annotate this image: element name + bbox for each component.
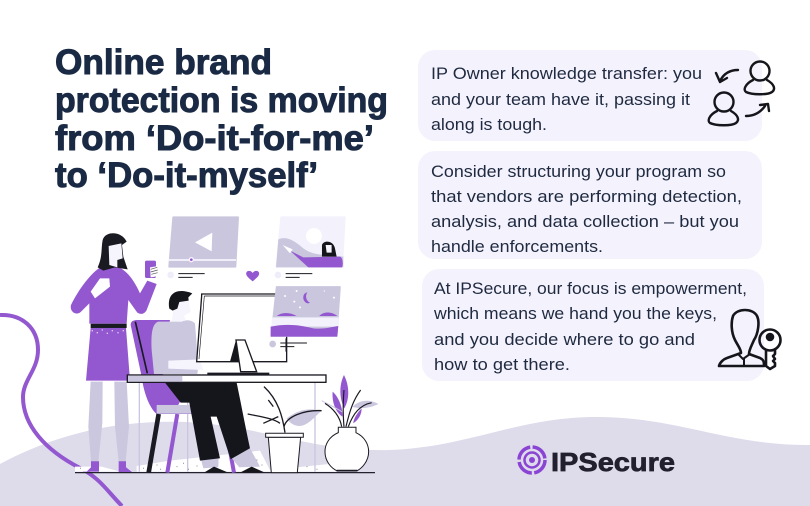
text: knowledge transfer: IP Owner knowledge transfer: you <box>431 64 702 83</box>
title: to ‘Do-it-myself’ <box>55 156 318 195</box>
hair <box>169 291 192 311</box>
text: knowledge transfer: along is tough. <box>431 115 547 134</box>
chair <box>131 320 234 473</box>
icon: person with key <box>719 310 780 369</box>
text: empowerment: At IPSecure, our focus is empowerment, <box>434 279 747 298</box>
panel: knowledge transfer <box>418 50 774 141</box>
belt <box>91 324 127 328</box>
hair <box>98 233 128 271</box>
monitor <box>197 294 287 374</box>
pants <box>165 383 250 461</box>
face and neck <box>172 301 191 322</box>
text: empowerment: and you decide where to go and <box>434 330 695 349</box>
text: program structure <box>431 162 742 256</box>
panel: night landscape <box>269 287 340 352</box>
title <box>55 43 388 195</box>
chair back <box>131 320 227 414</box>
title: protection is moving <box>55 81 388 120</box>
shoes <box>204 467 265 473</box>
panel: program structure <box>418 151 762 259</box>
text: program structure: handle enforcements. <box>431 237 603 256</box>
torso <box>151 320 198 374</box>
panel: photo card <box>275 217 345 278</box>
desk <box>127 375 326 382</box>
legs <box>88 382 129 462</box>
plant: vase <box>322 375 377 471</box>
skirt <box>86 328 130 381</box>
sweater <box>71 266 157 324</box>
face <box>109 243 123 267</box>
text: knowledge transfer <box>431 64 702 134</box>
man <box>151 291 265 473</box>
text: empowerment: which means we hand you the keys, <box>433 304 717 323</box>
decorative curve <box>0 315 122 506</box>
panel: empowerment <box>422 269 780 381</box>
panel: video player <box>167 217 238 278</box>
illustration: people at desk <box>71 217 377 473</box>
shoes <box>87 461 132 472</box>
icon: heart <box>246 271 259 281</box>
desk legs <box>139 382 315 472</box>
woman <box>71 233 159 472</box>
ground speckle <box>75 451 337 472</box>
title: from ‘Do-it-for-me’ <box>55 119 374 158</box>
monitor stand <box>230 340 240 362</box>
text: program structure: that vendors are performing detection, <box>431 187 742 206</box>
text: empowerment: how to get there. <box>434 355 570 374</box>
chair seat <box>157 405 225 414</box>
phone hand <box>150 266 159 277</box>
socks <box>201 448 260 468</box>
hand <box>91 278 110 298</box>
text: knowledge transfer: and your team have it, passing it <box>431 90 690 109</box>
logo icon <box>519 447 545 473</box>
logo <box>519 447 675 477</box>
logo text: IPSecure <box>551 447 675 477</box>
icon: two people exchanging <box>709 62 774 125</box>
floor line <box>75 471 375 475</box>
arm <box>168 359 203 370</box>
chair legs <box>149 414 159 473</box>
phone <box>145 261 156 278</box>
text: program structure: Consider structuring your program so <box>431 162 726 181</box>
text: program structure: analysis, and data collection – but you <box>431 212 739 231</box>
plant: left pot <box>248 387 322 473</box>
background hill <box>0 417 810 506</box>
text: empowerment <box>433 279 747 374</box>
title: Online brand <box>55 43 272 82</box>
